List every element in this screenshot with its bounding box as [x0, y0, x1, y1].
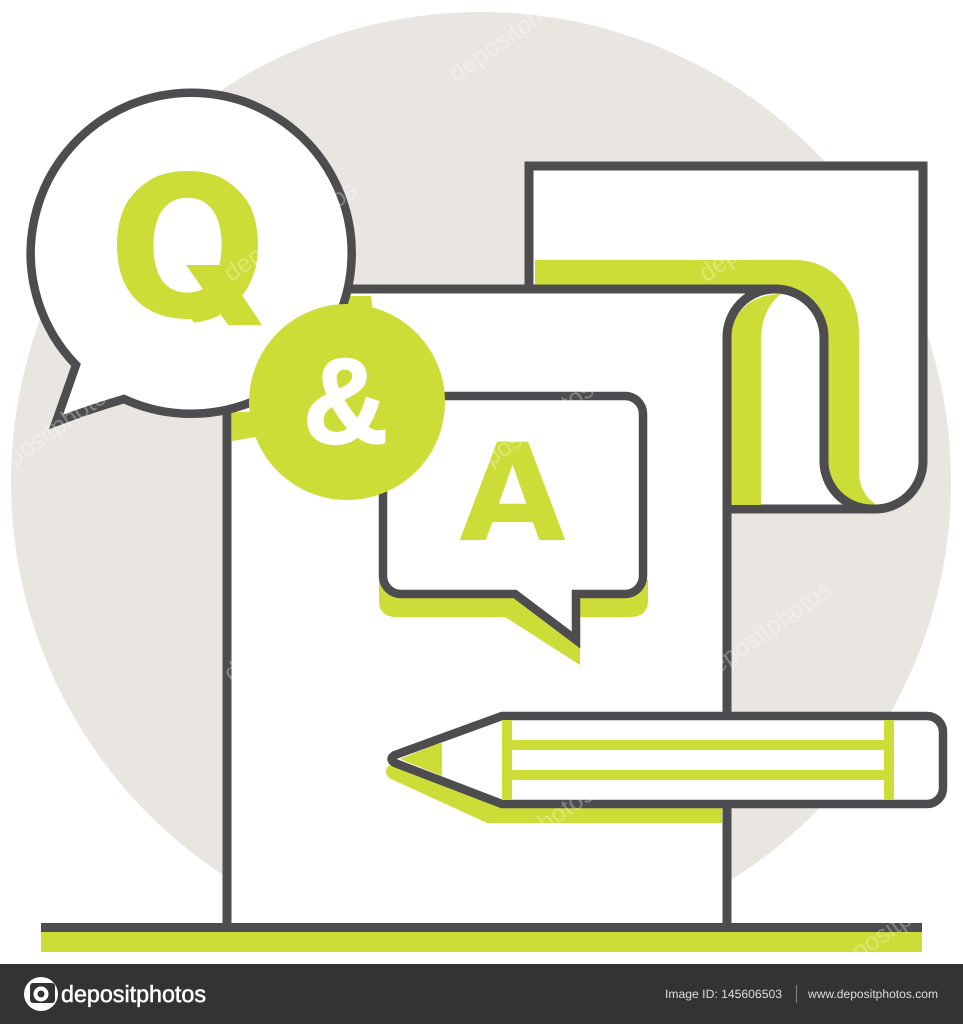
green shadows behind Q bubble: [232, 296, 373, 441]
answer speech bubble: [379, 396, 648, 665]
watermarks: depositphotos: [824, 869, 963, 982]
ampersand circle: [249, 304, 445, 500]
green shadow band on scroll: [535, 260, 878, 506]
website: www.depositphotos.com: [807, 987, 938, 1001]
watermarks: depositphotos: [219, 575, 362, 688]
answer bubble green shadow: [379, 580, 648, 665]
footer logo text: depositphotos: [61, 981, 206, 1007]
watermarks: depositphotos: [694, 575, 837, 688]
watermarks: depositphotos: [219, 175, 362, 288]
green inner fold of scroll: [731, 294, 781, 505]
footer logo icon: [24, 977, 58, 1011]
letter Q: Q: [108, 130, 267, 366]
letter A: A: [459, 412, 569, 574]
watermarks: depositphotos: [694, 175, 837, 288]
letter Q: [116, 171, 262, 325]
watermarks: depositphotos: [456, 779, 599, 892]
pencil green shadow: [386, 758, 722, 823]
back sheet of scrolled paper: [529, 166, 923, 509]
image id: Image ID: 145606503: [665, 987, 782, 1001]
Q speech bubble: [31, 93, 352, 422]
footer bar: [0, 964, 963, 1024]
pencil tip: [400, 742, 442, 776]
ampersand circle: &: [303, 339, 388, 473]
ground line: [41, 923, 922, 952]
watermarks: depositphotos: [456, 375, 599, 488]
main document page: [227, 289, 872, 927]
pencil green stripes: [502, 720, 894, 800]
pencil: [386, 716, 943, 823]
